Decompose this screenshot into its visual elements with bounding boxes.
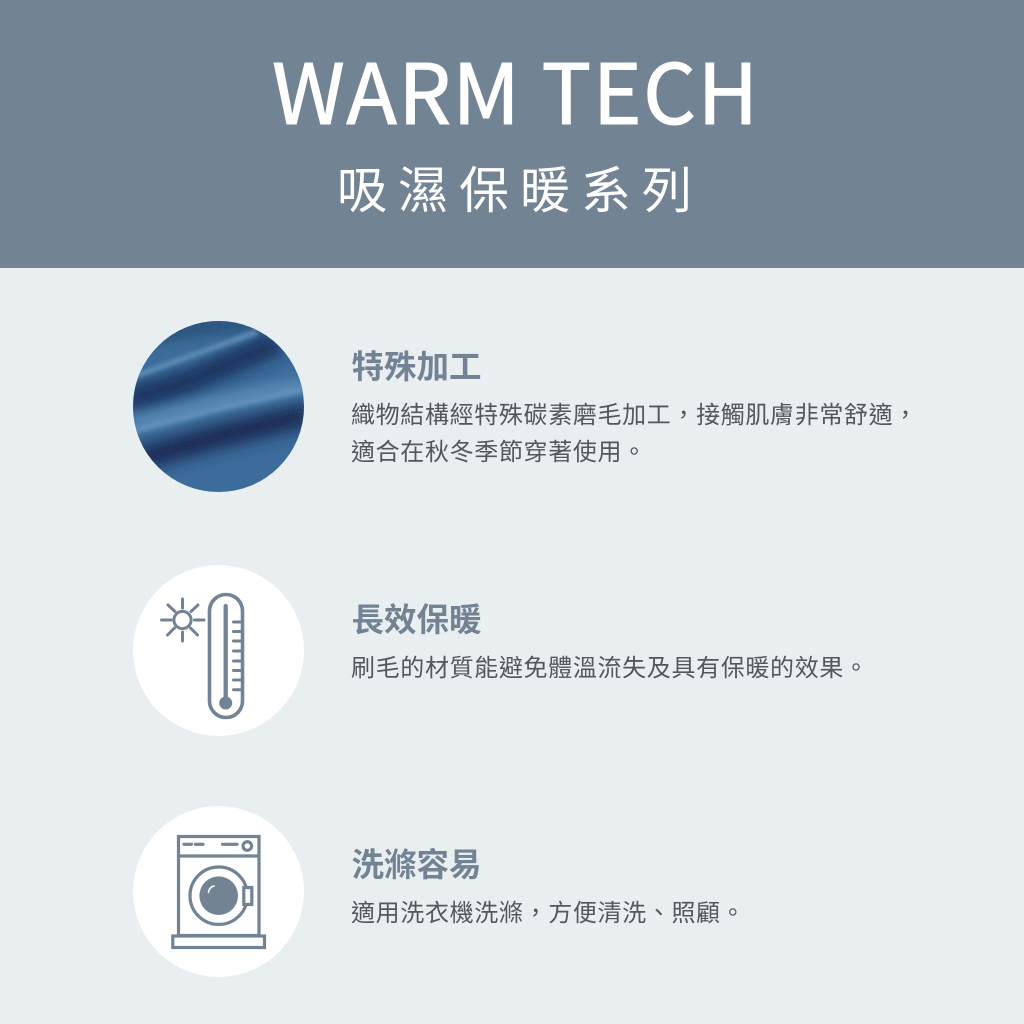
fabric swatch image [133,321,304,492]
description: 織物結構經特殊碳素磨毛加工，接觸肌膚非常舒適， [351,395,918,430]
icon: washing machine [133,806,304,977]
subtitle: 吸濕保暖系列 [337,151,703,223]
panel: special processing [133,321,918,492]
panel: easy washing [133,806,745,977]
icon: thermometer and sun [133,565,304,736]
description: 適用洗衣機洗滌，方便清洗、照顧。 [351,893,745,928]
header band [0,0,1024,268]
heading: 特殊加工 [352,341,482,388]
description: 刷毛的材質能避免體溫流失及具有保暖的效果。 [351,648,869,683]
description [351,395,918,467]
panel: long-lasting warmth [133,565,869,736]
heading: 洗滌容易 [352,839,482,886]
drum highlight [208,886,214,892]
description: 適合在秋冬季節穿著使用。 [351,432,647,467]
title: WARM TECH [272,28,760,148]
heading: 長效保暖 [352,594,482,641]
